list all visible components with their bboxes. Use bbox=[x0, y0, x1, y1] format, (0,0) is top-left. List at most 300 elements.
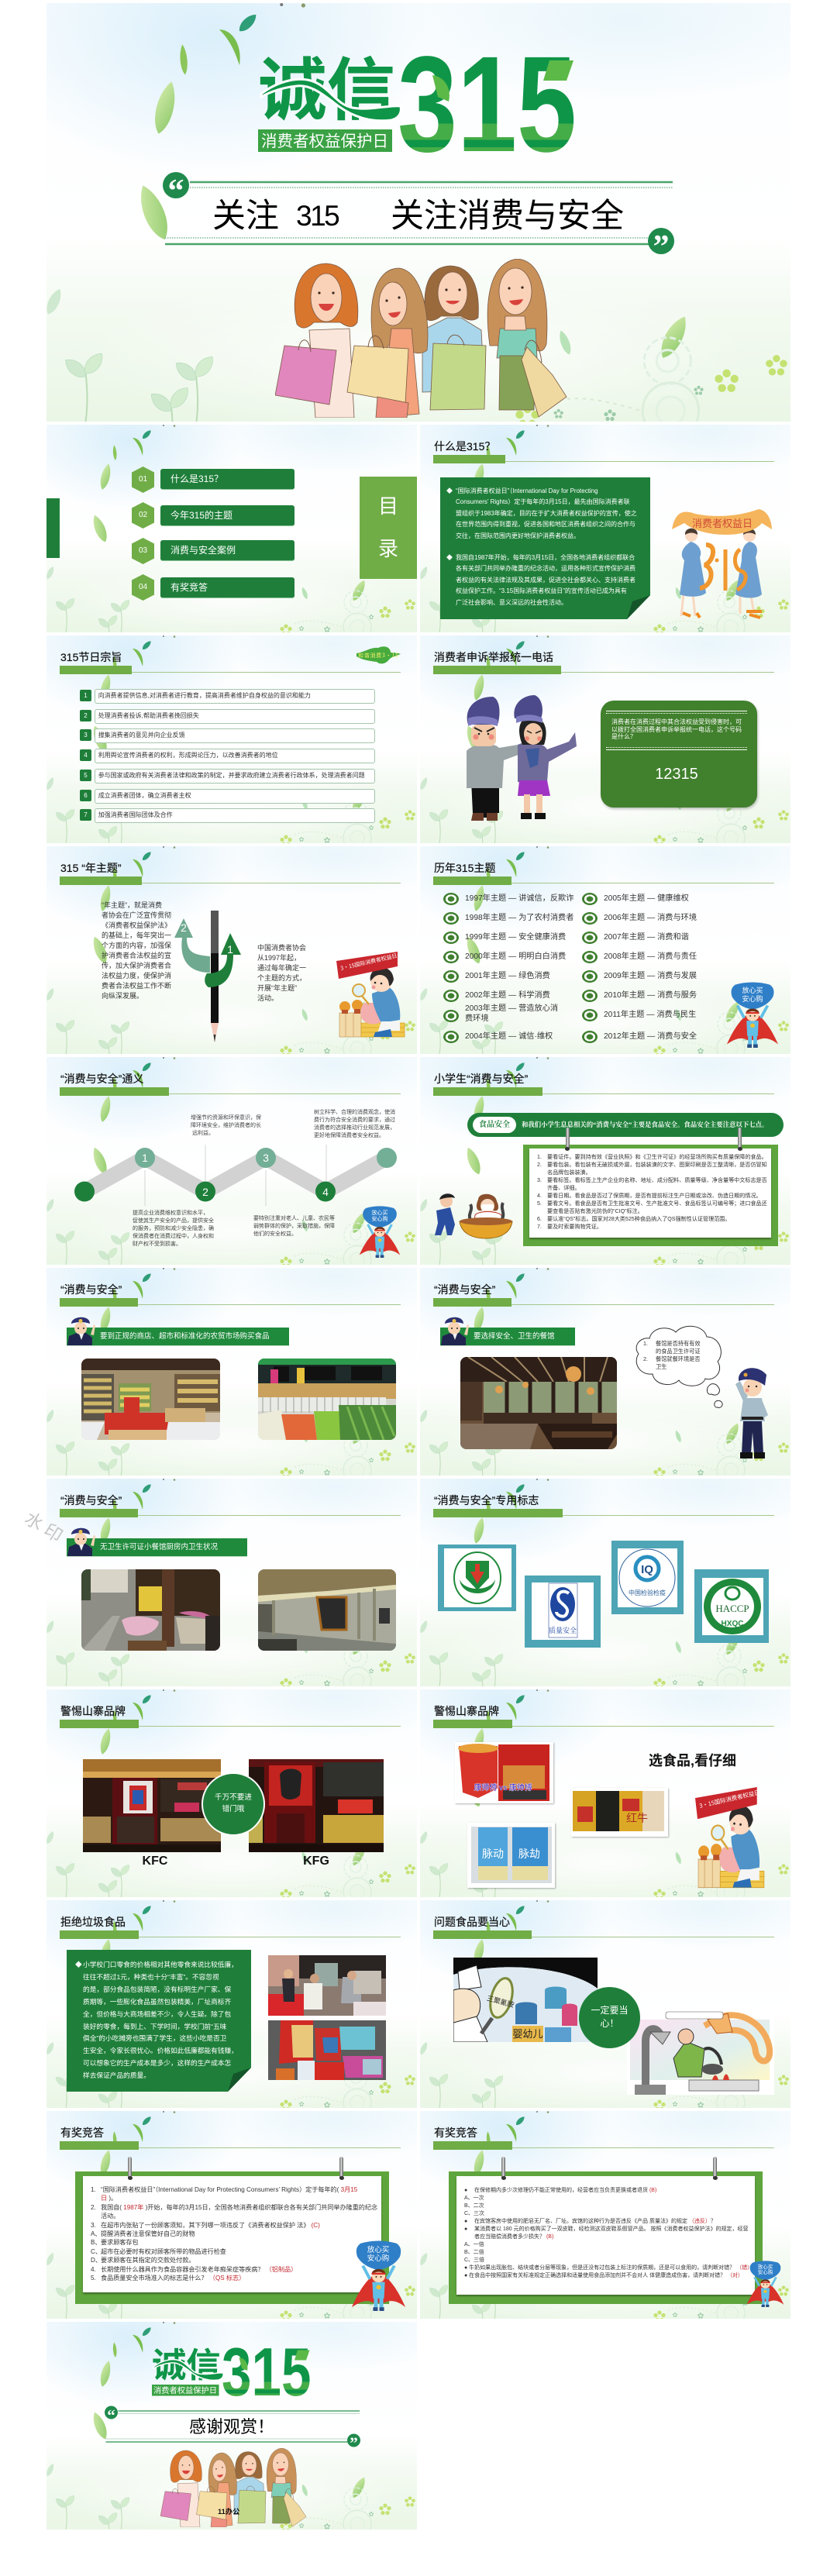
illustration: hero with shield: 安心购 bbox=[372, 1215, 388, 1223]
slide: quiz two bbox=[420, 2111, 790, 2319]
panel: junk food text bbox=[67, 1950, 251, 2092]
theme 2000 bbox=[443, 951, 566, 963]
panel: definition text: Consumers’ Rights）定于每年的3月15日，最先由国际消费者联 bbox=[456, 498, 630, 505]
panel: junk food text: 样去保证产品的质量。 bbox=[83, 2071, 150, 2079]
heading: “消费与安全” bbox=[60, 1494, 122, 1507]
theme 1999 bbox=[443, 932, 566, 944]
pencil and arrows bbox=[174, 911, 241, 1042]
card: quiz questions: 在超市内张贴了一份顾客须知，其下列哪一项违反了《消费者权益保护 法》 (C) bbox=[101, 2222, 320, 2229]
heading: “消费与安全” bbox=[434, 1283, 495, 1296]
panel: junk food text: 可以想象它的生产成本是多少，这样的生产成本怎 bbox=[83, 2059, 231, 2067]
purpose item 4 bbox=[80, 749, 375, 763]
purpose item 5 bbox=[80, 769, 375, 783]
heading: 315节日宗旨 bbox=[60, 651, 122, 663]
banner bbox=[67, 1328, 289, 1345]
theme 2004 bbox=[465, 1031, 553, 1043]
card: quiz questions: ● 在食品中按照国家有关标准规定正确选择和适量使用食品添加剂并不会对人 体健康造成伤害，请判断对错？ （对） bbox=[464, 2273, 743, 2278]
quote frame: “ bbox=[167, 174, 184, 209]
theme 2007 bbox=[582, 932, 689, 944]
contents label: 目 bbox=[378, 494, 398, 518]
heading: 警惕山寨品牌 bbox=[434, 1705, 499, 1717]
banner bbox=[440, 1328, 575, 1345]
photo: energy drinks bbox=[571, 1788, 668, 1837]
card: quiz questions: 在保修期内多少次修理仍不能正常使用的，经营者应当负责更换或者退货 (B) bbox=[474, 2188, 656, 2193]
text node 1 bbox=[133, 1210, 157, 1248]
illustration: kid with banner: 3·15国际消费者权益日 bbox=[339, 952, 398, 973]
logo: 诚信315: 消费者权益保护日 bbox=[153, 2384, 217, 2395]
slide: consumption and safety meaning: 促使其生产安全的产品，提供安全 bbox=[133, 1218, 214, 1224]
card: quiz questions: 4. bbox=[91, 2266, 96, 2273]
icon: police officer bbox=[64, 1527, 96, 1556]
quote frame bbox=[105, 2405, 360, 2443]
item 01: 什么是315？ bbox=[170, 474, 223, 484]
slide: quiz one bbox=[46, 2111, 417, 2319]
callout circle: 心！ bbox=[600, 2018, 618, 2029]
cloud text: 餐馆是否持有有效 bbox=[656, 1340, 701, 1347]
theme 2003 bbox=[465, 1004, 558, 1026]
card: quiz questions: 1. bbox=[91, 2186, 96, 2193]
theme 2007: 2007年主题 — 消费和谐 bbox=[604, 933, 689, 942]
illustration: two officers bbox=[467, 695, 577, 821]
callout circle: 一定要当 bbox=[591, 2005, 628, 2016]
purpose item 7: 7 bbox=[84, 811, 88, 818]
pencil and arrows: 1 bbox=[227, 943, 233, 956]
theme 2008 bbox=[582, 951, 697, 963]
zigzag chart: 2 bbox=[202, 1186, 208, 1198]
card: quiz questions: 5. bbox=[91, 2275, 96, 2282]
card: seven points: 要看包装。看包装有无破损或外漏，包装装潢的文字、图案印刷是否工整清晰，是否仿冒知 bbox=[547, 1162, 767, 1168]
question text: 以拨打全国消费者申诉举报统一电话，这个号码 bbox=[611, 726, 742, 733]
heading: 消费者申诉举报统一电话 bbox=[434, 651, 553, 663]
panel: definition text: “国际消费者权益日”（International Day for Protecting bbox=[456, 487, 598, 494]
tag: food safety: 食品安全 bbox=[479, 1121, 510, 1129]
slide: consumption and safety meaning: 增强节约资源和环保意识，保 bbox=[191, 1115, 261, 1121]
item 02: 今年315的主题 bbox=[170, 510, 232, 521]
card: quiz questions: ● bbox=[464, 2188, 467, 2193]
card: quiz questions: 2. bbox=[91, 2204, 96, 2211]
right text: 中国消费者协会 bbox=[257, 944, 306, 952]
hotline number: 12315 bbox=[655, 766, 698, 783]
slide: annual theme bbox=[46, 846, 417, 1054]
purpose item 3: 3 bbox=[84, 732, 88, 739]
card: quiz questions: 活动。 bbox=[101, 2213, 119, 2220]
zigzag chart: 3 bbox=[263, 1152, 269, 1164]
tag: food safety bbox=[473, 1117, 516, 1133]
watermark text: 11办公 bbox=[218, 2508, 239, 2516]
badge logo: 和谐消费3·15 bbox=[358, 652, 398, 659]
slide: safe restaurant bbox=[420, 1268, 790, 1476]
panel: definition text: 盟组织于1983年确定，目的在于扩大消费者权益保护的宣传，使之 bbox=[456, 510, 637, 517]
card clip right bbox=[738, 1128, 742, 1150]
photo: sports drinks bbox=[467, 1823, 555, 1888]
banner: 无卫生许可证小餐馆厨房内卫生状况 bbox=[100, 1543, 218, 1551]
heading: 什么是315？ bbox=[434, 440, 495, 453]
purpose item 1 bbox=[80, 689, 375, 704]
label: CIQ bbox=[611, 1541, 684, 1614]
panel: definition text: 我国自1987年开始，每年的3月15日，全国各地消费者组织都联合 bbox=[456, 554, 635, 561]
purpose item 6: 6 bbox=[84, 792, 88, 799]
photo: energy drinks: 红牛 bbox=[626, 1810, 648, 1826]
card: quiz questions: 某消费者以 180 元的价格购买了一双皮鞋，经检测这双皮鞋系假冒产品。 按照《消费者权益保护法》的规定，经营 bbox=[474, 2226, 749, 2232]
card: seven points: 要及时索要购物凭证。 bbox=[547, 1224, 602, 1230]
card: seven points: 7. bbox=[537, 1224, 542, 1230]
purpose item 4: 利用舆论宣传消费者的权利，形成舆论压力，以改善消费者的地位 bbox=[98, 752, 278, 759]
heading: 警惕山寨品牌 bbox=[60, 1705, 126, 1717]
heading: “消费与安全”通义 bbox=[60, 1073, 143, 1085]
card clip left bbox=[128, 2157, 132, 2179]
card: quiz questions: B、 bbox=[91, 2239, 101, 2246]
card: quiz questions: 提醒消费者注意保管好自己的财物 bbox=[101, 2230, 195, 2237]
cloud text: 的食品卫生许可证 bbox=[656, 1348, 701, 1355]
purpose item 6 bbox=[80, 789, 375, 804]
right text bbox=[257, 944, 306, 1002]
card: seven points: 2. bbox=[537, 1162, 542, 1168]
purpose item 1: 向消费者提供信息,对消费者进行教育，提高消费者维护自身权益的意识和能力 bbox=[98, 692, 311, 699]
photo: KFC shop bbox=[83, 1759, 221, 1852]
card: quiz questions: B、二倍 bbox=[464, 2250, 484, 2255]
card clip right bbox=[713, 2157, 717, 2179]
heading: 315 “年主题” bbox=[60, 862, 122, 874]
illustration: women with banner bbox=[672, 509, 772, 619]
panel: definition text: 交往，在国际范围内更好地保护消费者权益。 bbox=[456, 532, 580, 539]
heading: 问题食品要当心 bbox=[434, 1916, 510, 1928]
thought cloud bbox=[632, 1323, 725, 1412]
item 04: 有奖竞答 bbox=[170, 582, 208, 593]
card clip left bbox=[501, 2157, 505, 2179]
slide: consumption and safety meaning: 更好地保障消费者安全权益。 bbox=[314, 1133, 384, 1138]
left text: 护消费者合法权益的宣 bbox=[102, 952, 171, 959]
logo: 诚信315: 315 bbox=[222, 2333, 312, 2410]
theme 2012: 2012年主题 — 消费与安全 bbox=[604, 1032, 697, 1041]
slide: consumption and safety meaning: 的服务，预防和减少安全隐患，确 bbox=[133, 1226, 214, 1231]
photo: vegetables bbox=[258, 1359, 396, 1440]
illustration: hero with shield bbox=[351, 2240, 406, 2311]
card: quiz questions: A、一次 bbox=[464, 2195, 484, 2201]
item 03: 03 bbox=[139, 546, 147, 555]
theme 2002 bbox=[443, 990, 550, 1002]
watermark: 水印 bbox=[22, 1508, 70, 1548]
card: seven points: 要看文号。看食品是否有卫生批准文号、生产批准文号、食品标签认可编号等；进口食品还 bbox=[547, 1200, 767, 1207]
question text bbox=[611, 718, 742, 740]
theme 2006 bbox=[582, 912, 697, 925]
slide: contents bbox=[46, 425, 417, 632]
photo: greasy wall bbox=[258, 1569, 396, 1651]
left text: 法权益力度，使保护消 bbox=[102, 972, 171, 980]
left text: 者协会在广泛宣传贯彻 bbox=[102, 911, 171, 919]
comic: inspecting milk powder: 三聚氰胺 bbox=[486, 1992, 515, 2009]
card: quiz questions: D、 bbox=[91, 2257, 102, 2264]
card: seven points: 3. bbox=[537, 1177, 542, 1183]
illustration: women with banner: 消费者权益日 bbox=[692, 515, 753, 530]
label: CIQ: 中国检验检疫 bbox=[629, 1589, 666, 1597]
photo: sports drinks: 脉动 bbox=[482, 1846, 504, 1861]
photo: instant noodles: 康师傅 vs 康帅博 bbox=[474, 1781, 532, 1793]
left text: 费者合法权益工作不断 bbox=[102, 982, 171, 990]
title: 315 bbox=[296, 200, 338, 232]
text node 3 bbox=[253, 1215, 278, 1238]
slide: past themes bbox=[420, 846, 790, 1054]
theme 2002: 2002年主题 — 科学消费 bbox=[465, 991, 550, 1000]
card: quiz questions: 食品质量安全市场准入的标志是什么？ （QS 标志） bbox=[101, 2275, 245, 2282]
cloud text: 餐馆就餐环境是否 bbox=[656, 1355, 701, 1362]
purpose item 3 bbox=[80, 728, 375, 743]
card: quiz questions: C、三次 bbox=[464, 2211, 484, 2216]
heading: 有奖竞答 bbox=[434, 2127, 477, 2139]
illustration: four shopping women bbox=[275, 259, 567, 418]
slide: copycat KFC bbox=[46, 1689, 417, 1897]
theme 2003: 2003年主题 — 营造放心消 bbox=[465, 1004, 558, 1013]
card: quiz questions bbox=[449, 2171, 763, 2304]
panel: junk food text: 全，但价格与大商场相差不少，令人生疑。除了包 bbox=[83, 2010, 231, 2018]
left text: 的基础上，每年突出一 bbox=[102, 932, 171, 939]
panel: junk food text: 小学校门口零食的价格相对其他零食来说比较低廉， bbox=[83, 1961, 238, 1968]
slide: 315 purpose bbox=[46, 635, 417, 843]
cloud text: 卫生 bbox=[656, 1363, 666, 1370]
card: quiz questions: A、 bbox=[91, 2230, 101, 2237]
callout circle: 错门哦 bbox=[222, 1805, 244, 1813]
theme 1997 bbox=[443, 893, 574, 905]
item 04: 04 bbox=[139, 583, 147, 591]
photo: packaged snacks bbox=[268, 2020, 386, 2080]
slide: consumption and safety meaning: 要特别注重对老人、儿童、农民等 bbox=[253, 1216, 335, 1221]
item 03: 消费与安全案例 bbox=[170, 545, 236, 556]
right text: 从1997年起， bbox=[257, 954, 301, 962]
illustration: hero with shield bbox=[726, 982, 779, 1048]
theme 2011 bbox=[604, 1009, 696, 1021]
purpose item 4: 4 bbox=[84, 752, 88, 759]
banner bbox=[67, 1538, 247, 1556]
right text: 个主题的方式， bbox=[257, 974, 306, 982]
panel: hotline bbox=[601, 701, 757, 808]
purpose item 5: 5 bbox=[84, 772, 88, 779]
purpose item 1: 1 bbox=[84, 692, 88, 699]
theme 2010: 2010年主题 — 消费与服务 bbox=[604, 991, 697, 1000]
card: seven points: 要看标签。看标签上生产企业的名称、地址、成分配料、质量等级、净含量等中文标志是否 bbox=[547, 1177, 767, 1183]
fold corner bbox=[627, 595, 650, 619]
illustration: hero with shield: 放心买 bbox=[367, 2244, 389, 2254]
label: HACCP: HXQC bbox=[722, 1620, 743, 1628]
photo: kids at snack stall bbox=[268, 1955, 386, 2016]
intro pill bbox=[467, 1113, 784, 1137]
text node 2: 远利益。 bbox=[192, 1131, 214, 1136]
card: quiz questions: 3. bbox=[91, 2222, 96, 2229]
panel: junk food text: 生安全，令家长很忧心。价格如此低廉都能有钱赚， bbox=[83, 2047, 238, 2054]
theme 2003: 费环境 bbox=[465, 1014, 489, 1023]
slide: copycat products bbox=[420, 1689, 790, 1897]
illustration: four shopping women bbox=[160, 2448, 307, 2527]
theme 1998: 1998年主题 — 为了农村消费者 bbox=[465, 914, 574, 922]
card: quiz questions bbox=[75, 2171, 389, 2304]
theme 2010 bbox=[604, 990, 697, 1002]
panel: definition text: ◆ bbox=[446, 554, 453, 561]
purpose item 2 bbox=[80, 709, 375, 724]
theme 2001: 2001年主题 — 绿色消费 bbox=[465, 972, 550, 980]
slide: pupils and safety bbox=[420, 1057, 790, 1265]
text node 4 bbox=[314, 1109, 339, 1140]
intro sentence: 和我们小学生息息相关的“消费与安全”主要是食品安全。食品安全主要注意以下七点。 bbox=[522, 1121, 768, 1128]
card: quiz questions: ● bbox=[464, 2226, 467, 2232]
heading: 有奖竞答 bbox=[60, 2127, 104, 2139]
illustration: kid with banner: 3·15国际消费者权益日 bbox=[698, 1788, 761, 1810]
illustration: kid with banner bbox=[336, 952, 405, 1037]
card: quiz questions: “国际消费者权益日”（International Day for Protecting Consumers’ Rights）定于每年的( 3月15 bbox=[101, 2186, 357, 2193]
label: HACCP bbox=[694, 1569, 769, 1643]
theme 2000: 2000年主题 — 明明白白消费 bbox=[465, 952, 566, 961]
purpose item 7 bbox=[80, 808, 375, 823]
illustration: hero with shield bbox=[359, 1206, 401, 1258]
theme 1999: 1999年主题 — 安全健康消费 bbox=[465, 933, 566, 942]
panel: junk food text: 质期等，一些膨化食品虽然包装精美，厂址商标齐 bbox=[83, 1998, 231, 2006]
cloud text: 1. bbox=[643, 1340, 648, 1347]
purpose item 7: 加强消费者国际团体及合作 bbox=[98, 811, 173, 818]
card: quiz questions: 日 )。 bbox=[101, 2195, 117, 2202]
left text: 向纵深发展。 bbox=[102, 992, 143, 1000]
panel: definition text: 广泛社会影响、意义深远的社会性活动。 bbox=[456, 599, 567, 606]
slide: consumption and safety meaning: 费行为符合安全消费的要求，通过 bbox=[314, 1118, 395, 1123]
illustration: hero with shield: 放心买 bbox=[372, 1209, 388, 1217]
text node 1: 财产权不受到损害。 bbox=[133, 1242, 181, 1247]
card: seven points: 要认准“QS”标志。国家对28大类525种食品纳入了QS强制性认证管理范围。 bbox=[547, 1216, 730, 1222]
photo: restaurant bbox=[460, 1357, 617, 1449]
logo: 诚信315: 消费者权益保护日 bbox=[261, 128, 388, 151]
card: seven points bbox=[523, 1145, 778, 1246]
comic: illegal processing bbox=[627, 2010, 774, 2095]
panel: definition text: 各有关部门共同举办隆重的纪念活动，运用各种形式宣传保护消费 bbox=[456, 565, 636, 572]
card: seven points: 要查看是否贴有激光防伪的“CIQ”标注。 bbox=[547, 1208, 643, 1214]
panel: junk food text: ◆ bbox=[75, 1961, 82, 1968]
card: seven points: 名品牌包装装潢。 bbox=[547, 1169, 591, 1176]
theme 2004: 2004年主题 — 诚信·维权 bbox=[465, 1032, 553, 1041]
badge logo bbox=[356, 646, 401, 663]
callout circle bbox=[579, 1987, 640, 2048]
slide: cover bbox=[46, 3, 790, 422]
illustration: saluting officer bbox=[734, 1367, 770, 1458]
label: QS bbox=[525, 1576, 601, 1648]
purpose item 3: 搜集消费者的意见并向企业反馈 bbox=[98, 732, 185, 739]
card: quiz questions: C、 bbox=[91, 2248, 102, 2255]
slide: problem food bbox=[420, 1900, 790, 2108]
slide: thanks bbox=[46, 2322, 417, 2530]
thanks message: 感谢观赏！ bbox=[189, 2417, 274, 2437]
card: seven points: 齐备、详细。 bbox=[547, 1185, 580, 1191]
panel: definition text: 在世界范围内得到重视，促进各国和地区消费者组织之间的合作与 bbox=[456, 521, 636, 528]
left text bbox=[102, 901, 171, 1000]
slide: what is 315 bbox=[420, 425, 790, 632]
card: quiz questions: 要求顾客在其指定的交款处付款。 bbox=[101, 2257, 195, 2264]
banner: 要选择安全、卫生的餐馆 bbox=[474, 1332, 555, 1341]
logo: 诚信315: 诚信 bbox=[152, 2337, 221, 2387]
card: quiz questions: C、三倍 bbox=[464, 2257, 484, 2263]
label: pollution-free bbox=[438, 1545, 516, 1611]
illustration: hero with shield: 放心买 bbox=[758, 2262, 773, 2270]
comic: inspecting milk powder bbox=[453, 1958, 598, 2042]
illustration: hero with shield: 安心购 bbox=[742, 994, 763, 1004]
panel: junk food text: 俱全”的小吃摊旁也围满了学生，这些小吃是否卫 bbox=[83, 2034, 226, 2042]
pencil and arrows: 2 bbox=[181, 921, 187, 934]
card: quiz questions: 我国自( 1987年 )开始，每年的3月15日，全国各地消费者组织都联合各有关部门共同举办隆重的纪念 bbox=[101, 2204, 377, 2211]
theme 2001 bbox=[443, 970, 550, 983]
card: quiz questions: A、一倍 bbox=[464, 2242, 484, 2247]
left text: “年主题”，就是消费 bbox=[102, 901, 162, 909]
panel: definition text bbox=[440, 477, 650, 619]
slide: complaint hotline bbox=[420, 635, 790, 843]
fold corner bbox=[227, 2067, 252, 2092]
icon: police officer bbox=[64, 1317, 96, 1345]
callout circle bbox=[202, 1772, 265, 1836]
panel: definition text: 权益保护工作。“3.15国际消费者权益日”的宣传活动已成为具有 bbox=[456, 587, 627, 594]
title bbox=[212, 198, 624, 235]
item 01 bbox=[132, 467, 294, 493]
theme 2011: 2011年主题 — 消费与民生 bbox=[604, 1011, 696, 1019]
card: seven points: 4. bbox=[537, 1193, 542, 1199]
card clip right bbox=[339, 2157, 343, 2179]
purpose item 5: 参与国家或政府有关消费者法律和政策的制定，并要求政府建立消费者行政体系，处理消费者问题 bbox=[98, 772, 365, 779]
illustration: street food bbox=[432, 1192, 513, 1240]
theme 2009: 2009年主题 — 消费与发展 bbox=[604, 972, 697, 980]
label: HACCP: HACCP bbox=[715, 1603, 749, 1614]
illustration: hero with shield: 安心购 bbox=[758, 2268, 773, 2275]
purpose item 2: 2 bbox=[84, 712, 88, 719]
photo: sports drinks: 脉劫 bbox=[518, 1846, 540, 1861]
illustration: hero with shield bbox=[746, 2261, 784, 2307]
comic: inspecting milk powder: 婴幼儿 bbox=[512, 2026, 543, 2040]
card: quiz questions: ● bbox=[464, 2219, 467, 2224]
logo: 诚信315: 诚信 bbox=[258, 36, 395, 134]
slide: consumption and safety meaning: 树立科学、合理的消费观念，使消 bbox=[314, 1110, 395, 1115]
illustration: hero with shield: 安心购 bbox=[367, 2252, 389, 2263]
card: seven points: 6. bbox=[537, 1216, 542, 1222]
card: seven points: 1. bbox=[537, 1154, 542, 1160]
heading: “消费与安全”专用标志 bbox=[434, 1494, 539, 1507]
slide: unlicensed kitchens bbox=[46, 1479, 417, 1686]
label: CIQ: IQ bbox=[641, 1563, 653, 1576]
card: quiz questions: 者应当赔偿消费者多少损失？ (B) bbox=[474, 2234, 553, 2240]
panel: junk food text: 的是，部分食品包装简陋，没有标明生产厂家、保 bbox=[83, 1985, 231, 1993]
logo: 诚信315 bbox=[152, 2349, 312, 2396]
slide: reject junk food bbox=[46, 1900, 417, 2108]
label: QS: 质量安全 bbox=[549, 1625, 577, 1635]
item 04 bbox=[132, 574, 294, 601]
card: seven points: 要看日期。看食品是否过了保质期，是否有提前标注生产日期或涂改、伪造日期的情况。 bbox=[547, 1193, 762, 1199]
quote frame bbox=[163, 172, 674, 265]
theme 2012 bbox=[604, 1031, 697, 1043]
question text: 消费者在消费过程中其合法权益受到侵害时，可 bbox=[611, 718, 742, 725]
quote frame: ” bbox=[653, 229, 670, 265]
slide: consumption and safety meaning: 弱势群体的保护，采取措施，保障 bbox=[253, 1224, 335, 1229]
cloud text bbox=[643, 1340, 713, 1371]
zigzag chart bbox=[46, 1057, 417, 1265]
side bar bbox=[46, 498, 60, 558]
slide: regular shops bbox=[46, 1268, 417, 1476]
text node 3: 他们的安全权益。 bbox=[253, 1231, 297, 1237]
callout circle: 千万不要进 bbox=[215, 1793, 252, 1802]
banner: 要到正规的商店、超市和标准化的农贸市场购买食品 bbox=[100, 1332, 270, 1341]
quote frame: ” bbox=[350, 2433, 358, 2452]
heading: “消费与安全” bbox=[60, 1283, 122, 1296]
right text: 开展“年主题” bbox=[257, 984, 297, 992]
card: quiz questions: 超市在必要时有权对顾客所带的物品进行检查 bbox=[101, 2248, 226, 2255]
card: quiz questions: ● 牛奶如果出现胀包、结块或者分层等现象，但是还没有过包装上标注的保质期，还是可以食用的，请判断对错？ （错） bbox=[464, 2265, 753, 2271]
photo: instant noodles bbox=[455, 1742, 553, 1803]
card: quiz questions: 长期使用什么器具作为食品容器会引发老年痴呆症等疾病？ （铝制品） bbox=[101, 2266, 297, 2273]
heading: 小学生“消费与安全” bbox=[434, 1073, 528, 1085]
cloud text: 2. bbox=[643, 1355, 648, 1362]
item 03 bbox=[132, 538, 294, 564]
slide: consumption and safety meaning: 消费者的选择推动行业规范发展， bbox=[314, 1125, 395, 1131]
title: 关注消费与安全 bbox=[391, 198, 624, 235]
panel: definition text: 者权益的有关法律法规及其成果，促进全社会都关心、支持消费者 bbox=[456, 577, 636, 584]
icon: police officer bbox=[438, 1317, 470, 1345]
